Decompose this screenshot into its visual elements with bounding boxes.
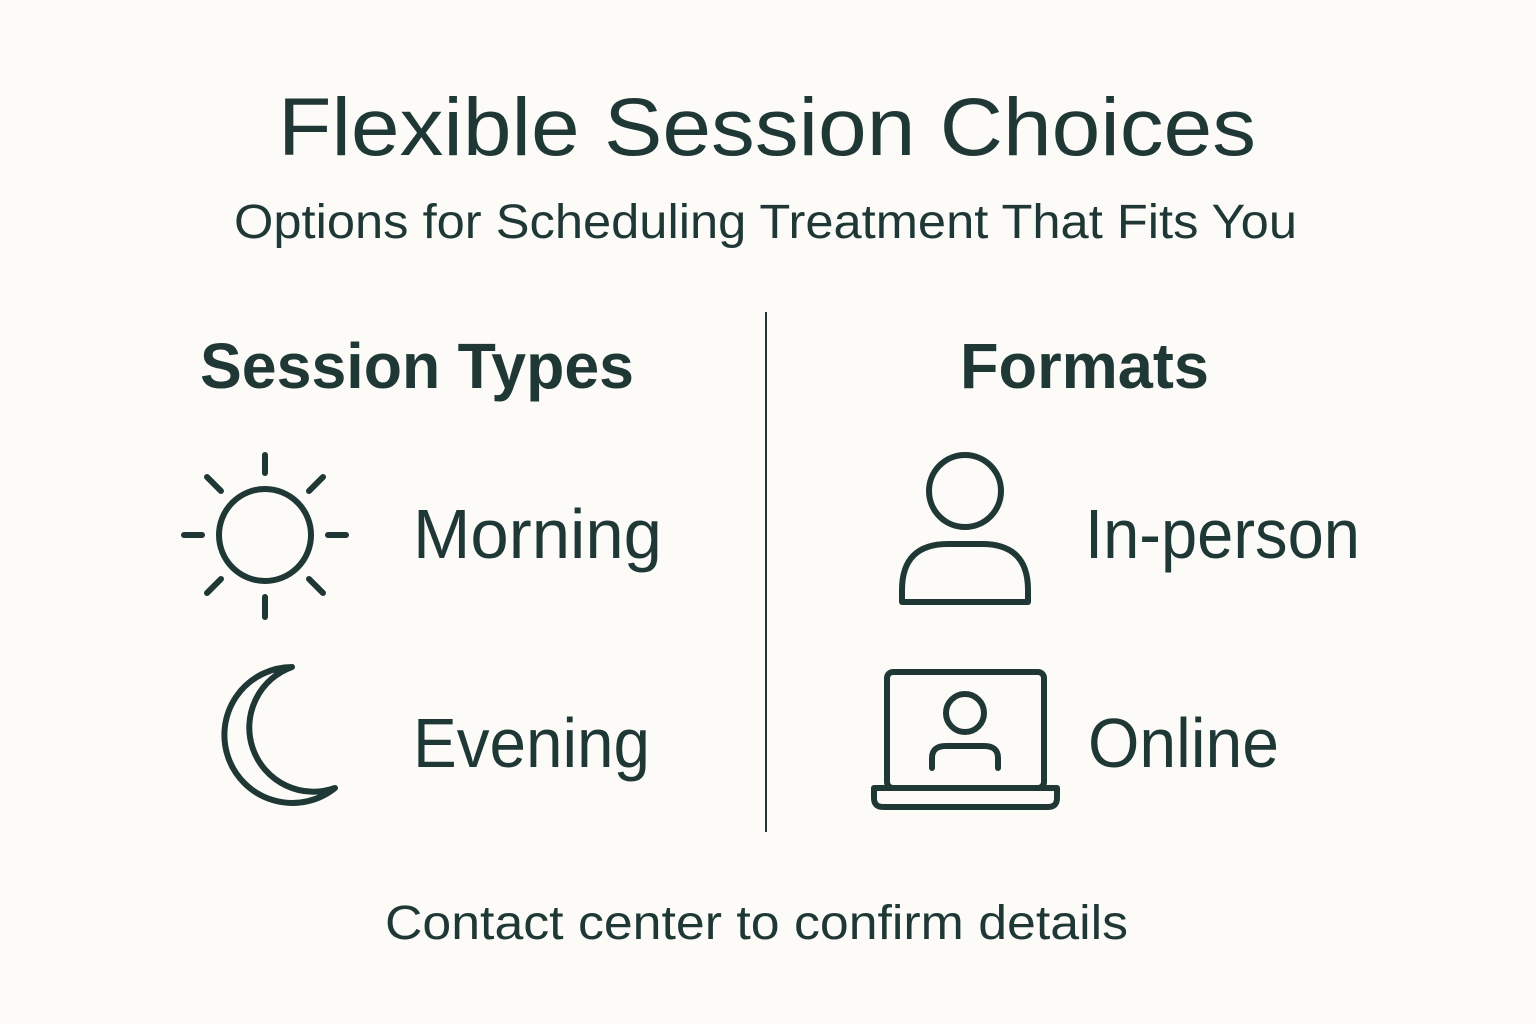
label: online: Online [1088, 704, 1279, 782]
footer note: Contact center to confirm details [385, 897, 1128, 950]
heading: formats: Formats [960, 330, 1209, 402]
icon: person [902, 455, 1028, 602]
divider [765, 312, 767, 832]
label: evening: Evening [413, 704, 650, 782]
icon: sun [184, 455, 346, 617]
label: in-person: In-person [1085, 495, 1360, 573]
subtitle: Options for Scheduling Treatment That Fits You [234, 196, 1297, 249]
icon: moon [224, 667, 335, 803]
heading: session types: Session Types [200, 330, 634, 402]
label: morning: Morning [413, 495, 662, 573]
title: Flexible Session Choices [278, 82, 1256, 173]
panel: session types [184, 330, 662, 803]
icon: laptop [874, 672, 1057, 807]
panel: formats [874, 330, 1360, 807]
